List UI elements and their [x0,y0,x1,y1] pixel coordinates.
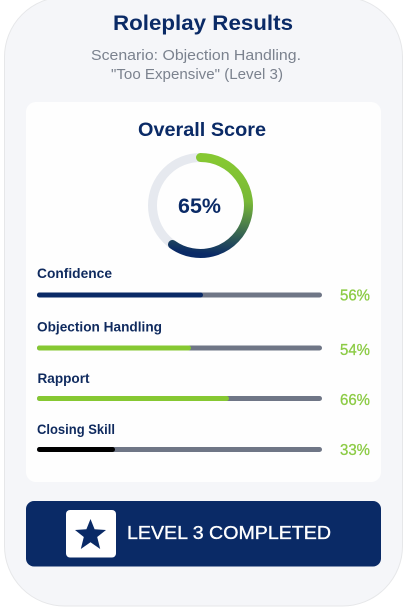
metric: rapport: 66% [340,392,370,409]
subtitle: Scenario: Objection Handling. [91,47,301,64]
heading: overall score: Overall Score [138,120,266,141]
metric: confidence: 56% [340,288,370,304]
metric: confidence: Confidence [37,266,112,281]
subtitle [91,47,301,83]
donut chart: 65%: 65% [178,194,221,218]
metric: objection handling: Objection Handling [37,320,162,334]
metric: closing skill [37,422,370,459]
banner label: LEVEL 3 COMPLETED [127,522,331,543]
metric: objection handling [37,320,370,359]
metric: rapport: Rapport [38,371,90,386]
panel: score card [26,102,381,482]
title: Roleplay Results [113,11,293,35]
banner: level completed [26,501,381,566]
metric: closing skill: Closing Skill [37,422,115,437]
donut chart: 65% [152,158,248,254]
icon: star [66,510,116,558]
metric: rapport [37,371,370,409]
subtitle: "Too Expensive" (Level 3) [111,66,283,83]
metric: closing skill: 33% [340,442,370,459]
metric: confidence [37,266,370,304]
metric: objection handling: 54% [340,342,370,359]
